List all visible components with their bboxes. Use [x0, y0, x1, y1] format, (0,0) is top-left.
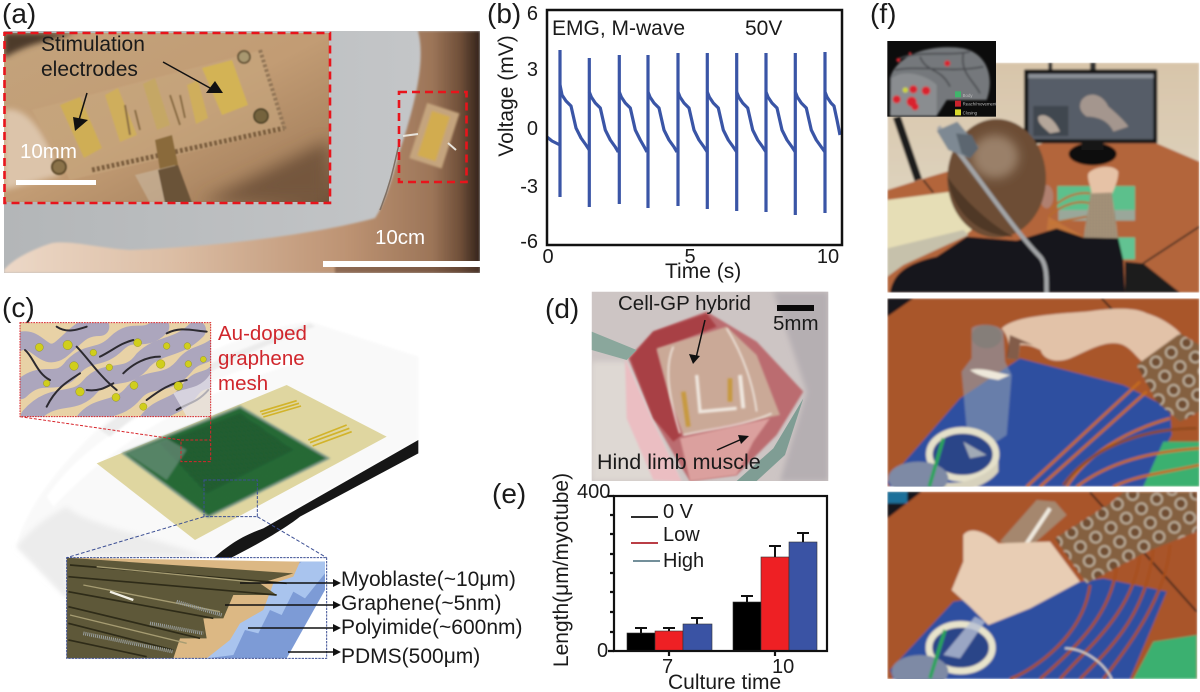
legend [631, 501, 704, 572]
error bars [635, 533, 809, 633]
y axis tick labels: 6 [527, 3, 538, 25]
y axis title: Voltage (mV) [495, 35, 518, 157]
brain scan inset [887, 41, 997, 117]
white scale bar 10mm [16, 180, 96, 185]
scale bar 5mm [777, 305, 814, 311]
surgical photograph [592, 292, 828, 482]
brain scan inset: Body [963, 93, 973, 98]
layer labels: Graphene(~5nm) [341, 592, 502, 615]
Au-doped graphene mesh label: Au-doped [218, 322, 307, 345]
Au-doped graphene mesh label: mesh [218, 372, 268, 395]
axis tick labels: 7 [662, 656, 673, 678]
blue inset: layer cross section [67, 558, 327, 658]
brain scan inset: Closing [963, 111, 978, 116]
x axis tick labels: 5 [684, 246, 696, 268]
panel label c: (c) [2, 292, 35, 323]
hind limb muscle label: Hind limb muscle [597, 450, 761, 474]
y axis tick labels: -6 [520, 231, 538, 253]
arm photograph [4, 31, 480, 273]
y axis tick labels: 3 [527, 59, 538, 81]
chart header text: EMG, M-wave [552, 17, 685, 40]
axis tick labels: 0 [597, 640, 608, 662]
y axis tick labels: -3 [520, 176, 538, 198]
axis tick labels: 400 [577, 481, 610, 503]
panel f: prosthetic control photos [870, 0, 1199, 688]
panel c: graphene mesh device schematic [2, 292, 522, 668]
layer arrows [225, 579, 341, 656]
panel e: myotube length bar chart [492, 473, 827, 692]
axis tick labels [577, 481, 794, 678]
chart frame [547, 10, 842, 245]
layer labels: Polyimide(~600nm) [341, 616, 522, 639]
gold electrode leads [260, 401, 352, 446]
white scale bar 10cm [323, 261, 480, 267]
red zoom source box [20, 417, 211, 462]
white curved skin surface [17, 322, 418, 598]
x axis tick labels: 0 [542, 246, 554, 268]
panel b: EMG voltage chart [487, 0, 842, 283]
y axis tick labels [520, 3, 538, 253]
arrows to electrodes [73, 62, 223, 131]
legend: High [663, 550, 704, 572]
layer labels: PDMS(500μm) [341, 645, 480, 668]
photo: hand pouring from bottle [887, 492, 1197, 688]
brain scan inset: Reach/movement [963, 102, 997, 107]
legend: Low [663, 524, 700, 546]
red dashed zoom boxes [4, 33, 466, 203]
cream substrate [97, 385, 387, 540]
layer labels: Myoblaste(~10μm) [341, 568, 516, 591]
axis tick labels: 10 [772, 656, 794, 678]
panel label e: (e) [492, 478, 526, 509]
y axis tick labels: 0 [527, 118, 538, 140]
Au-doped graphene mesh label: graphene [218, 347, 305, 370]
legend: 0 V [663, 501, 694, 523]
black band under surface [213, 440, 418, 558]
panel b: EMG voltage chart: 50V [745, 17, 782, 40]
panel d: implanted hybrid photo [545, 292, 828, 482]
green cell mesh [123, 407, 328, 517]
red inset: Au-doped graphene mesh [20, 322, 212, 418]
10cm label: 10cm [375, 226, 425, 249]
photo: hand reaching for bottle [887, 298, 1199, 495]
x axis tick labels [542, 246, 839, 268]
cell-GP hybrid label: Cell-GP hybrid [618, 292, 751, 315]
EMG waveform [547, 50, 840, 215]
layer labels [341, 568, 522, 668]
bars [627, 542, 817, 651]
panel label d: (d) [545, 293, 579, 324]
5mm label: 5mm [773, 312, 819, 335]
Au-doped graphene mesh label [218, 322, 307, 395]
10mm label: 10mm [20, 140, 77, 163]
x axis title: Time (s) [665, 260, 741, 283]
panel a: electrodes on arm photo: electrodes [41, 58, 138, 81]
blue zoom source box [67, 480, 327, 558]
y axis title: Length(μm/myotube) [550, 473, 573, 667]
photo: user with brain stimulation [887, 41, 1199, 293]
x axis tick labels: 10 [817, 246, 839, 268]
chart frame and ticks [608, 496, 827, 656]
stimulation electrodes label: Stimulation [41, 33, 145, 56]
photo arrows [689, 320, 749, 450]
zoomed inset of stimulation electrodes [4, 33, 329, 203]
panel a: electrodes on arm photo [2, 0, 480, 273]
